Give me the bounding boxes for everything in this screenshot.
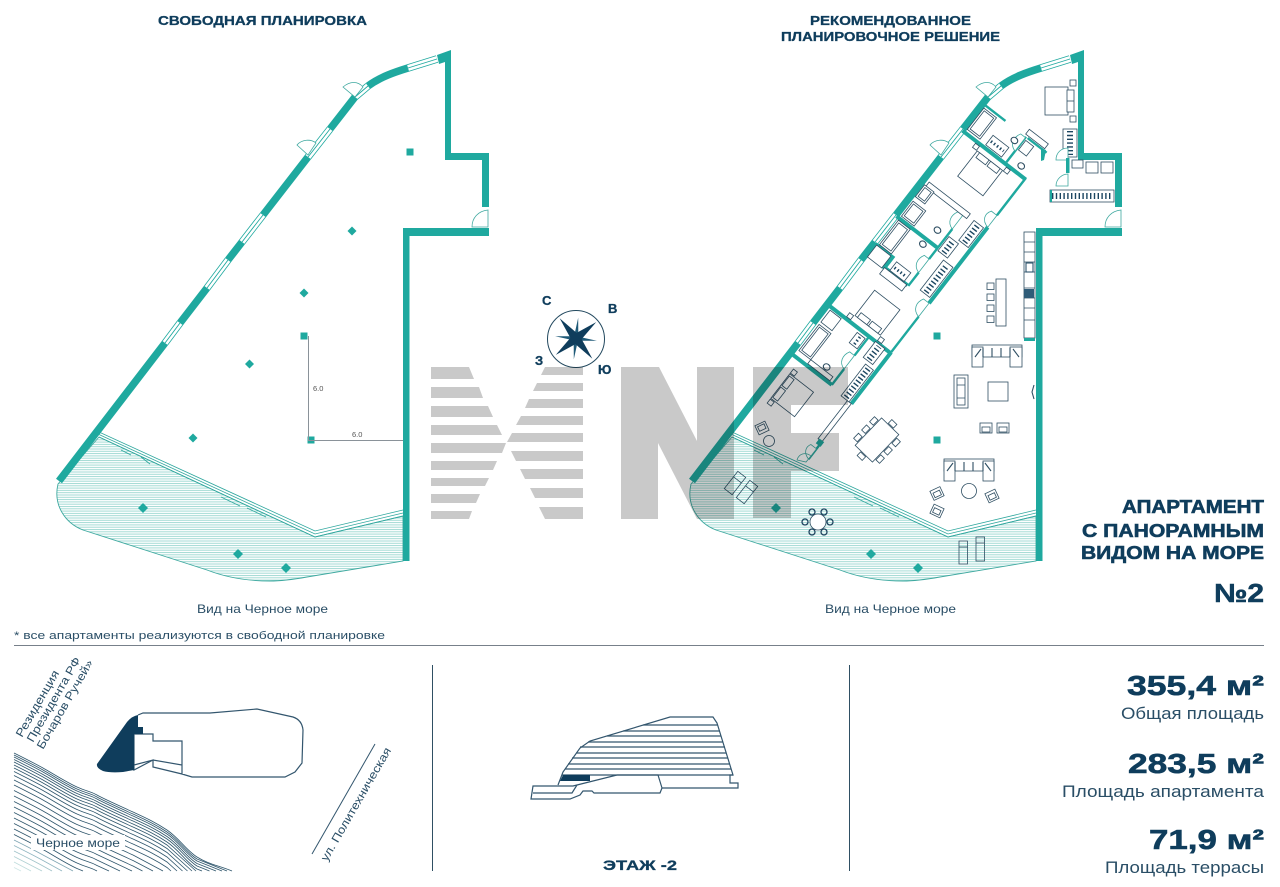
master bedroom, dressing room bbox=[1041, 80, 1114, 202]
compass letters: З bbox=[535, 353, 543, 368]
compass letters: С bbox=[542, 293, 552, 308]
stat: total area: Общая площадь bbox=[1121, 705, 1264, 723]
plan captions bbox=[197, 602, 956, 616]
dimension lines: 6.0 bbox=[313, 384, 323, 393]
stat: total area bbox=[1121, 670, 1264, 723]
heading: recommended layout bbox=[781, 13, 1000, 44]
rooms strip: partitions and bathroom fixtures bbox=[746, 97, 1052, 460]
doors bbox=[781, 131, 1045, 459]
toilets bbox=[822, 130, 1036, 390]
residence label: Президента РФ bbox=[25, 655, 84, 744]
heading: recommended layout: ПЛАНИРОВОЧНОЕ РЕШЕНИЕ bbox=[781, 29, 1000, 44]
compass letters bbox=[535, 293, 617, 377]
location map bbox=[14, 655, 394, 871]
compass letters: Ю bbox=[598, 362, 611, 377]
sea label bbox=[31, 835, 125, 850]
street: ул. Политехническая bbox=[319, 746, 394, 864]
compass rose bbox=[535, 293, 617, 379]
watermark logo bbox=[431, 367, 848, 519]
residence label bbox=[14, 655, 96, 752]
living room furniture bbox=[930, 345, 1034, 518]
dining table bbox=[847, 410, 907, 470]
beds bbox=[767, 140, 1014, 436]
stat: apartment area: 283,5 м² bbox=[1128, 748, 1264, 779]
stat: terrace area bbox=[1105, 824, 1264, 877]
panel: recommended layout floor plan bbox=[690, 50, 1122, 581]
title block: №2 bbox=[1214, 578, 1264, 608]
residence label: Резиденция bbox=[14, 669, 62, 740]
street bbox=[312, 744, 394, 864]
footnote: * все апартаменты реализуются в свободной планировке bbox=[14, 630, 385, 642]
columns bbox=[771, 332, 940, 573]
heading: recommended layout: РЕКОМЕНДОВАННОЕ bbox=[810, 13, 971, 28]
stat: terrace area: Площадь террасы bbox=[1105, 859, 1264, 877]
residence label: Бочаров Ручей» bbox=[35, 658, 96, 752]
title block: С ПАНОРАМНЫМ bbox=[1082, 521, 1264, 541]
wardrobes bbox=[790, 180, 985, 402]
sea label: Черное море bbox=[36, 838, 120, 850]
title block bbox=[1081, 497, 1264, 608]
stat: apartment area bbox=[1062, 748, 1265, 801]
floor diagram bbox=[531, 717, 738, 873]
plan captions: Вид на Черное море bbox=[825, 602, 956, 616]
plan captions: Вид на Черное море bbox=[197, 602, 328, 616]
stat: apartment area: Площадь апартамента bbox=[1062, 783, 1265, 801]
title block: ВИДОМ НА МОРЕ bbox=[1081, 543, 1264, 563]
panel: free layout floor plan bbox=[57, 50, 489, 581]
stat: total area: 355,4 м² bbox=[1127, 670, 1264, 701]
stat: terrace area: 71,9 м² bbox=[1149, 824, 1264, 855]
sea lines bbox=[14, 753, 232, 871]
compass letters: В bbox=[608, 301, 617, 316]
dimension lines: 6.0 bbox=[352, 430, 362, 439]
heading: free layout: СВОБОДНАЯ ПЛАНИРОВКА bbox=[158, 13, 368, 28]
bedroom terrace armchair and side table bbox=[755, 421, 811, 462]
floor label: ЭТАЖ -2 bbox=[603, 857, 677, 873]
building outline bbox=[97, 709, 303, 777]
columns bbox=[138, 148, 414, 573]
tubs and basins bbox=[794, 99, 1048, 398]
title block: АПАРТАМЕНТ bbox=[1122, 497, 1264, 517]
kitchen and bar bbox=[987, 232, 1035, 341]
dimension lines bbox=[308, 336, 403, 440]
terrace furniture bbox=[724, 471, 984, 564]
